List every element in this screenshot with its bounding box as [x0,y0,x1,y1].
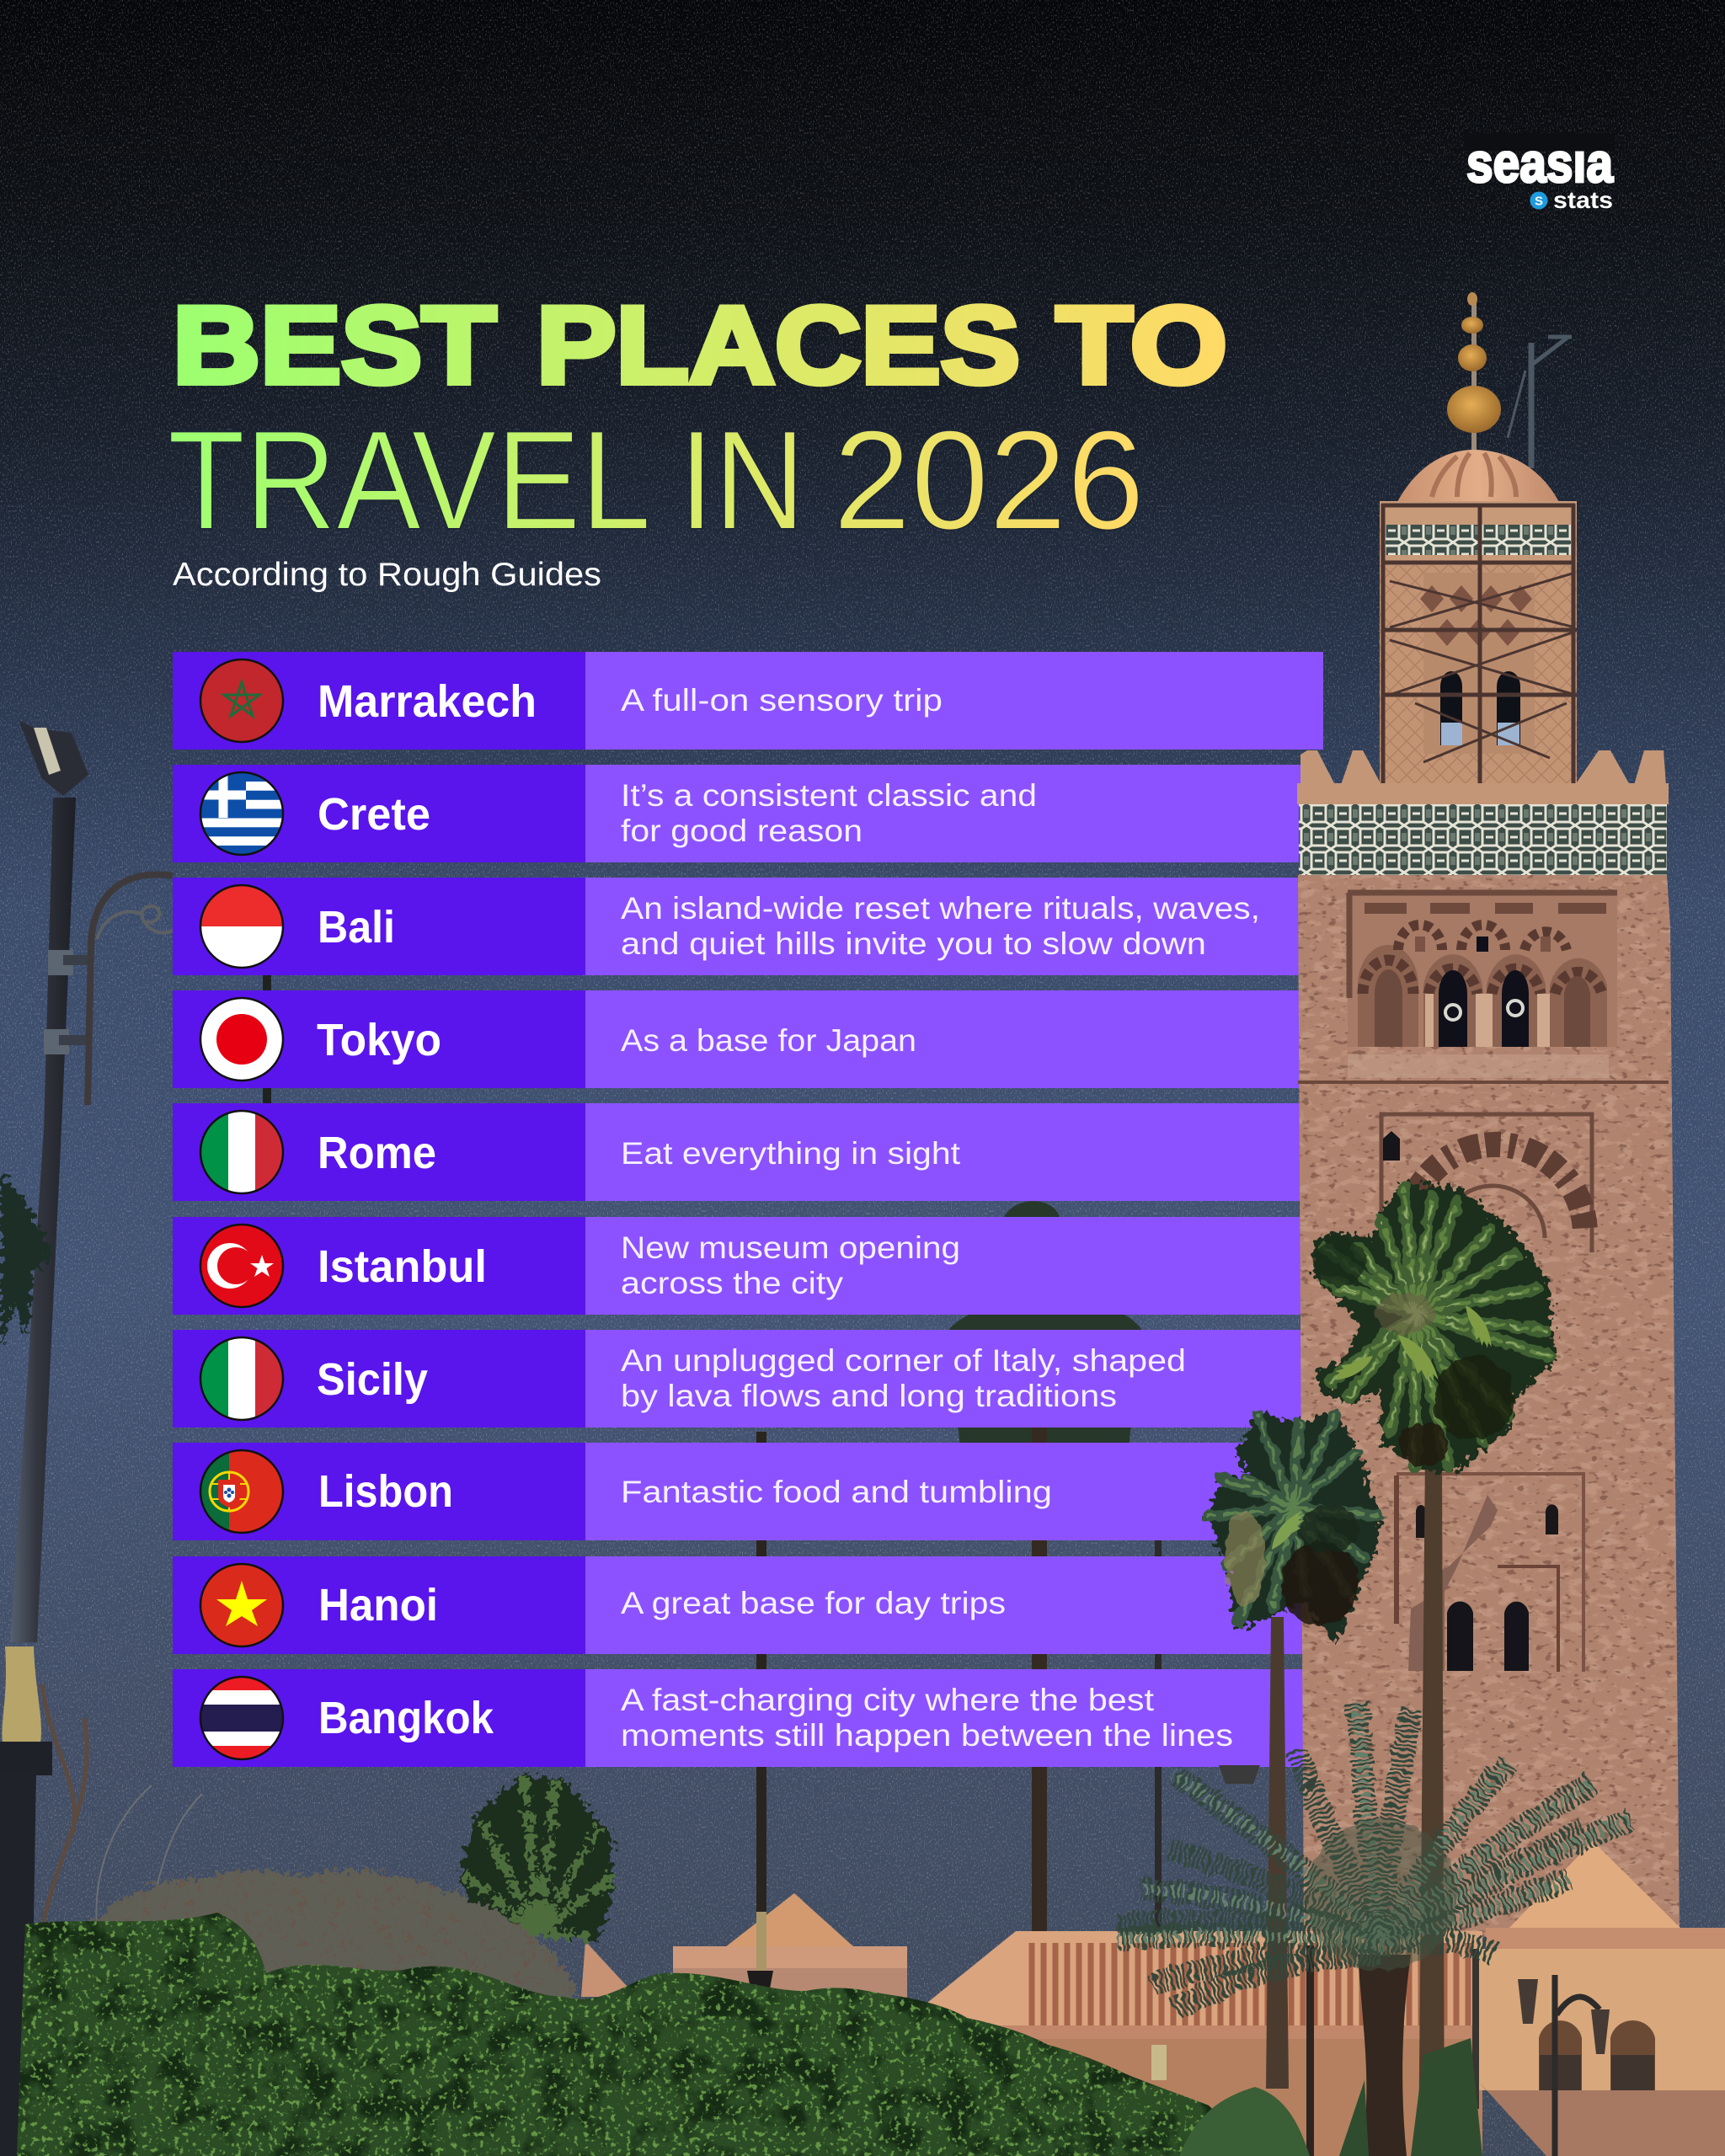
description: A full-on sensory trip [621,683,943,718]
main shaft [1298,875,1680,1937]
name: Bangkok [318,1693,494,1743]
palm: tall [1311,1182,1556,1474]
title: travel in 2026 [168,401,1145,559]
flag: Thailand [200,1677,283,1759]
row: Marrakech [173,652,1323,750]
name: Lisbon [318,1466,453,1517]
flag: Italy [200,1337,283,1420]
tall trunks [1266,1457,1445,2156]
flag: Vietnam [200,1564,283,1646]
title: best places to: PLACES [537,283,1020,406]
flag: Indonesia [200,885,283,968]
dome [1397,450,1560,504]
bare branches [42,1684,202,1929]
flag: Japan [200,998,283,1081]
scaffolding [1381,504,1577,783]
logo: seasia stats [1464,131,1616,213]
description: An unplugged corner of Italy, shaped [621,1343,1186,1378]
striped roof [923,1931,1482,2030]
description: As a base for Japan [621,1023,916,1058]
title: travel in 2026: IN [679,401,805,559]
name: Sicily [317,1354,428,1405]
logo: seasia stats: S [1535,194,1543,209]
description: An island-wide reset where rituals, waves, [621,891,1260,926]
row: Sicily [173,1330,1306,1428]
Koutoubia minaret [1297,292,1680,1937]
name: Crete [318,789,430,840]
merlons [1300,750,1666,785]
foreground plants [1179,2038,1482,2156]
description line 2: moments still happen between the lines [621,1718,1233,1753]
description line 2: for good reason [621,814,862,848]
title: travel in 2026: TRAVEL [168,401,651,559]
name: Hanoi [318,1580,438,1630]
palm: tuft behind hedge [459,1774,612,1943]
title: best places to: BEST [173,283,496,406]
row: Bali [173,878,1306,975]
row: Rome [173,1103,1306,1201]
description: A great base for day trips [621,1586,1006,1620]
row: Lisbon [173,1443,1306,1540]
logo: seasia stats: stats [1553,187,1613,213]
subtitle: According to Rough Guides [173,557,601,593]
gold lamp post [747,1912,773,1998]
row: Hanoi [173,1556,1306,1654]
logo: seasia stats: seasia [1466,131,1614,194]
description: A fast-charging city where the best [621,1683,1155,1717]
row: Crete [173,765,1306,862]
left palm [0,1175,52,1348]
upper tower [1380,501,1577,787]
grey bushes [84,1870,581,2013]
pyramid [725,1893,854,1947]
carved arcade panel [1298,893,1669,1084]
antenna [1508,337,1572,468]
title: travel in 2026: 2026 [833,401,1145,559]
flag: Italy [200,1111,283,1193]
name: Marrakech [318,676,537,727]
arch motif panel [1381,1114,1592,1252]
name: Tokyo [317,1015,441,1065]
flag: Greece [200,772,283,855]
name: Bali [318,902,395,953]
name: Rome [318,1128,436,1178]
row: Tokyo [173,990,1306,1088]
finial [1447,292,1501,455]
flag: Morocco [200,659,283,742]
name: Istanbul [318,1241,487,1292]
lower window panel [1397,1474,1583,1672]
row: Bangkok [173,1669,1310,1767]
description line 2: and quiet hills invite you to slow down [621,926,1206,961]
cornice [1297,783,1669,804]
left lamp post [0,720,173,2156]
description: Fantastic food and tumbling [621,1475,1052,1509]
description: Eat everything in sight [621,1136,961,1171]
title: best places to: TO [1056,283,1227,406]
trees behind list [263,969,1162,2055]
flag: Turkey [200,1225,283,1307]
title: best places to [173,283,1227,406]
description: New museum opening [621,1230,960,1265]
description line 2: across the city [621,1266,844,1300]
palm: small [1207,1413,1381,1645]
palm: date palm [1118,1702,1629,2156]
right building [1472,1841,1725,2156]
row: Istanbul [173,1217,1306,1315]
central building [581,1893,1482,2156]
description: It’s a consistent classic and [621,778,1037,813]
description line 2: by lava flows and long traditions [621,1379,1117,1413]
green hedge [17,1913,1258,2156]
tile band [1299,804,1667,875]
street poles and lanterns [1151,1765,1318,2156]
list: ten destinations [173,652,1323,1767]
flag: Portugal [200,1450,283,1533]
small gable [581,1941,637,1997]
